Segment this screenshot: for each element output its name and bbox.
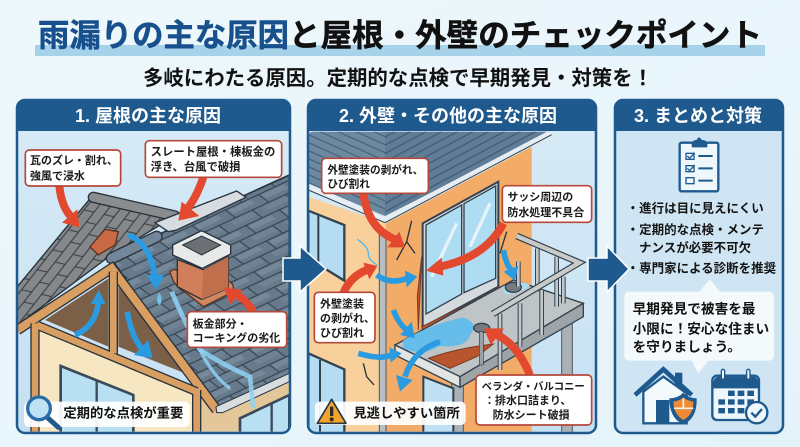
water puddle (403, 317, 474, 352)
timber frame (17, 268, 217, 410)
tiled roof (18, 200, 162, 324)
blue arrows (75, 235, 164, 358)
subtitle: 多岐にわたる原因。定期的な点検で早期発見・対策を！ (143, 67, 653, 90)
panel frame and header (615, 100, 783, 433)
flashing panel (155, 191, 246, 232)
gutter (216, 373, 289, 413)
panel: summary (615, 100, 783, 433)
callout: veranda (476, 375, 592, 425)
callout: sash (502, 186, 592, 222)
callout: flashing: コーキングの劣化 (193, 331, 280, 345)
note: overlooked: 見逃しやすい箇所 (353, 404, 460, 420)
main window (423, 182, 498, 327)
title: と屋根・外壁のチェックポイント (289, 17, 762, 53)
callout: paint lower (314, 292, 375, 343)
panel frame and header (17, 100, 290, 433)
note: inspection: 定期的な点検が重要 (63, 404, 183, 420)
callout: slate: 浮き、台風で破損 (151, 160, 241, 174)
ridge tiles (93, 197, 175, 216)
broken tile (90, 229, 118, 255)
bullet list: ・進行は目に見えにくい (627, 201, 764, 216)
bullet list: ナンスが必要不可欠 (639, 240, 752, 255)
soffit and siding (308, 132, 385, 216)
attic (45, 278, 108, 347)
red arrows (59, 177, 253, 312)
bullet list (627, 201, 777, 275)
callout: veranda: ：排水口詰まり、 (484, 393, 571, 407)
callout: slate (145, 141, 282, 177)
red arrows (343, 193, 530, 375)
speech bubble (624, 279, 774, 373)
speech bubble: を守りましょう。 (633, 339, 741, 355)
cracks (363, 221, 507, 385)
drains (505, 282, 521, 292)
bullet list: ・専門家による診断を推奨 (627, 260, 777, 275)
panel: roof causes (17, 100, 290, 433)
water streaks (172, 292, 253, 408)
blue arrows (358, 250, 518, 392)
speech bubble: 早期発見で被害を最 (633, 300, 756, 316)
balcony floor (395, 280, 583, 377)
icon: warning (317, 399, 346, 423)
illustration: roof (17, 141, 289, 433)
callout: paint: 外壁塗装の剥がれ、 (327, 163, 423, 176)
balcony support (562, 323, 572, 433)
callout: paint lower: ひび割れ (320, 326, 364, 340)
panel frame and header: 1. 屋根の主な原因 (75, 106, 221, 126)
speech bubble: 小限に！安心な住まい (633, 320, 769, 336)
bullet list: ・定期的な点検・メンテ (627, 222, 764, 237)
icon: clipboard (680, 137, 718, 191)
callout: paint (322, 158, 428, 193)
callout: sash: サッシ周辺の (507, 191, 573, 204)
callout: veranda: 防水シート破損 (493, 407, 570, 421)
callout: slate: スレート屋根・棟板金の (151, 144, 275, 158)
panel frame and header (308, 100, 596, 433)
icon: house with shield (635, 369, 697, 424)
left wall (308, 197, 386, 433)
callout: sash: 防水処理不具合 (507, 205, 584, 219)
panel frame and header: 2. 外壁・その他の主な原因 (339, 106, 557, 126)
callout: paint: ひび割れ (327, 178, 370, 191)
gable ridge (112, 237, 157, 258)
callout: tiles (25, 150, 121, 186)
panel: walls causes (308, 100, 596, 433)
callout: flashing (187, 312, 287, 347)
icon: calendar (712, 369, 767, 423)
slate roof (110, 175, 289, 412)
panel frame and header: 3. まとめと対策 (634, 106, 762, 126)
arrow: panel 1 to 2 (283, 246, 326, 292)
callout: flashing: 板金部分・ (193, 316, 248, 330)
title (35, 17, 765, 56)
illustration: wall and balcony (308, 132, 592, 433)
rusted seal (417, 257, 500, 332)
left windows (308, 211, 344, 281)
callout: tiles: 強風で浸水 (30, 168, 85, 182)
callout: veranda: ベランダ・バルコニー (482, 380, 585, 393)
callout: paint lower: 外壁塗装 (320, 296, 364, 310)
rust on floor (428, 344, 493, 368)
icon: magnifier (28, 397, 58, 427)
title: 雨漏りの主な原因 (38, 17, 289, 53)
windows (61, 366, 133, 433)
note: overlooked (315, 399, 466, 425)
wall (40, 332, 192, 432)
downpipe (379, 235, 386, 433)
callout: paint lower: の剥がれ、 (320, 311, 375, 325)
railing (493, 236, 579, 370)
note: inspection (24, 397, 190, 427)
chimney (170, 231, 233, 307)
right wall (386, 147, 532, 433)
callout: tiles: 瓦のズレ・割れ、 (30, 153, 118, 167)
arrow: panel 2 to 3 (588, 246, 629, 292)
